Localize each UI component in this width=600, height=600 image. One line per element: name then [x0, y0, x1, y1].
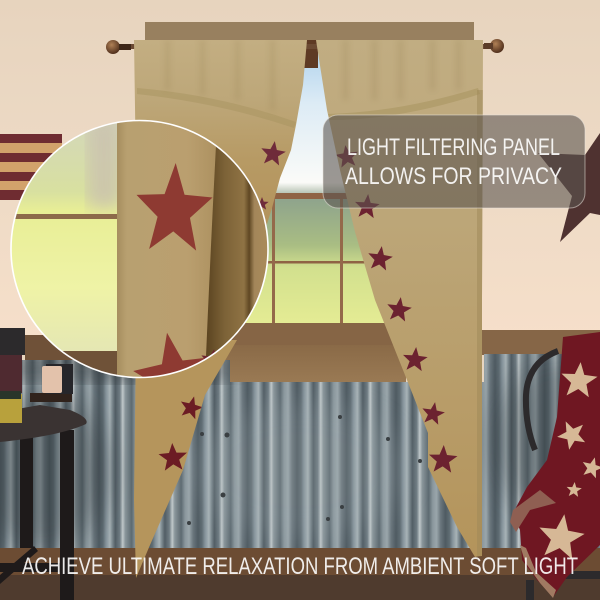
window — [240, 40, 390, 325]
lower red star — [133, 332, 204, 377]
table legs — [0, 430, 74, 600]
wood wainscot ledges — [0, 323, 600, 383]
floor and baseboard — [0, 548, 600, 600]
left curtain upper — [134, 40, 307, 240]
magnified detail circle — [10, 120, 269, 378]
left curtain lower — [134, 340, 237, 578]
curtain rod with finials — [106, 39, 504, 54]
wall blur at upper right of window — [88, 118, 120, 208]
flag wall art — [0, 134, 62, 200]
red star throw blanket — [510, 332, 600, 598]
wooden house yellow — [0, 394, 22, 423]
candle — [42, 366, 62, 393]
circle outline — [11, 120, 268, 378]
large red star — [135, 162, 214, 251]
fabric closeup — [117, 118, 217, 383]
corrugated metal wall — [0, 352, 600, 550]
chair — [526, 351, 600, 600]
metal barn star — [538, 133, 600, 242]
table top — [0, 405, 87, 442]
wooden window header — [145, 22, 474, 40]
callout text — [345, 134, 562, 190]
candle holder — [30, 393, 72, 402]
right curtain panel — [316, 40, 483, 560]
translucent callout panel — [323, 115, 585, 208]
window mullion — [10, 214, 118, 219]
house roof — [0, 391, 21, 399]
wall — [0, 0, 600, 340]
blurred window view — [12, 124, 117, 351]
dark fold — [206, 146, 268, 356]
sill — [62, 351, 117, 375]
table with decor — [0, 328, 87, 600]
wooden house dark — [0, 328, 25, 355]
wooden house maroon — [0, 355, 22, 393]
small dark star — [202, 350, 214, 359]
lantern frame — [46, 364, 73, 394]
